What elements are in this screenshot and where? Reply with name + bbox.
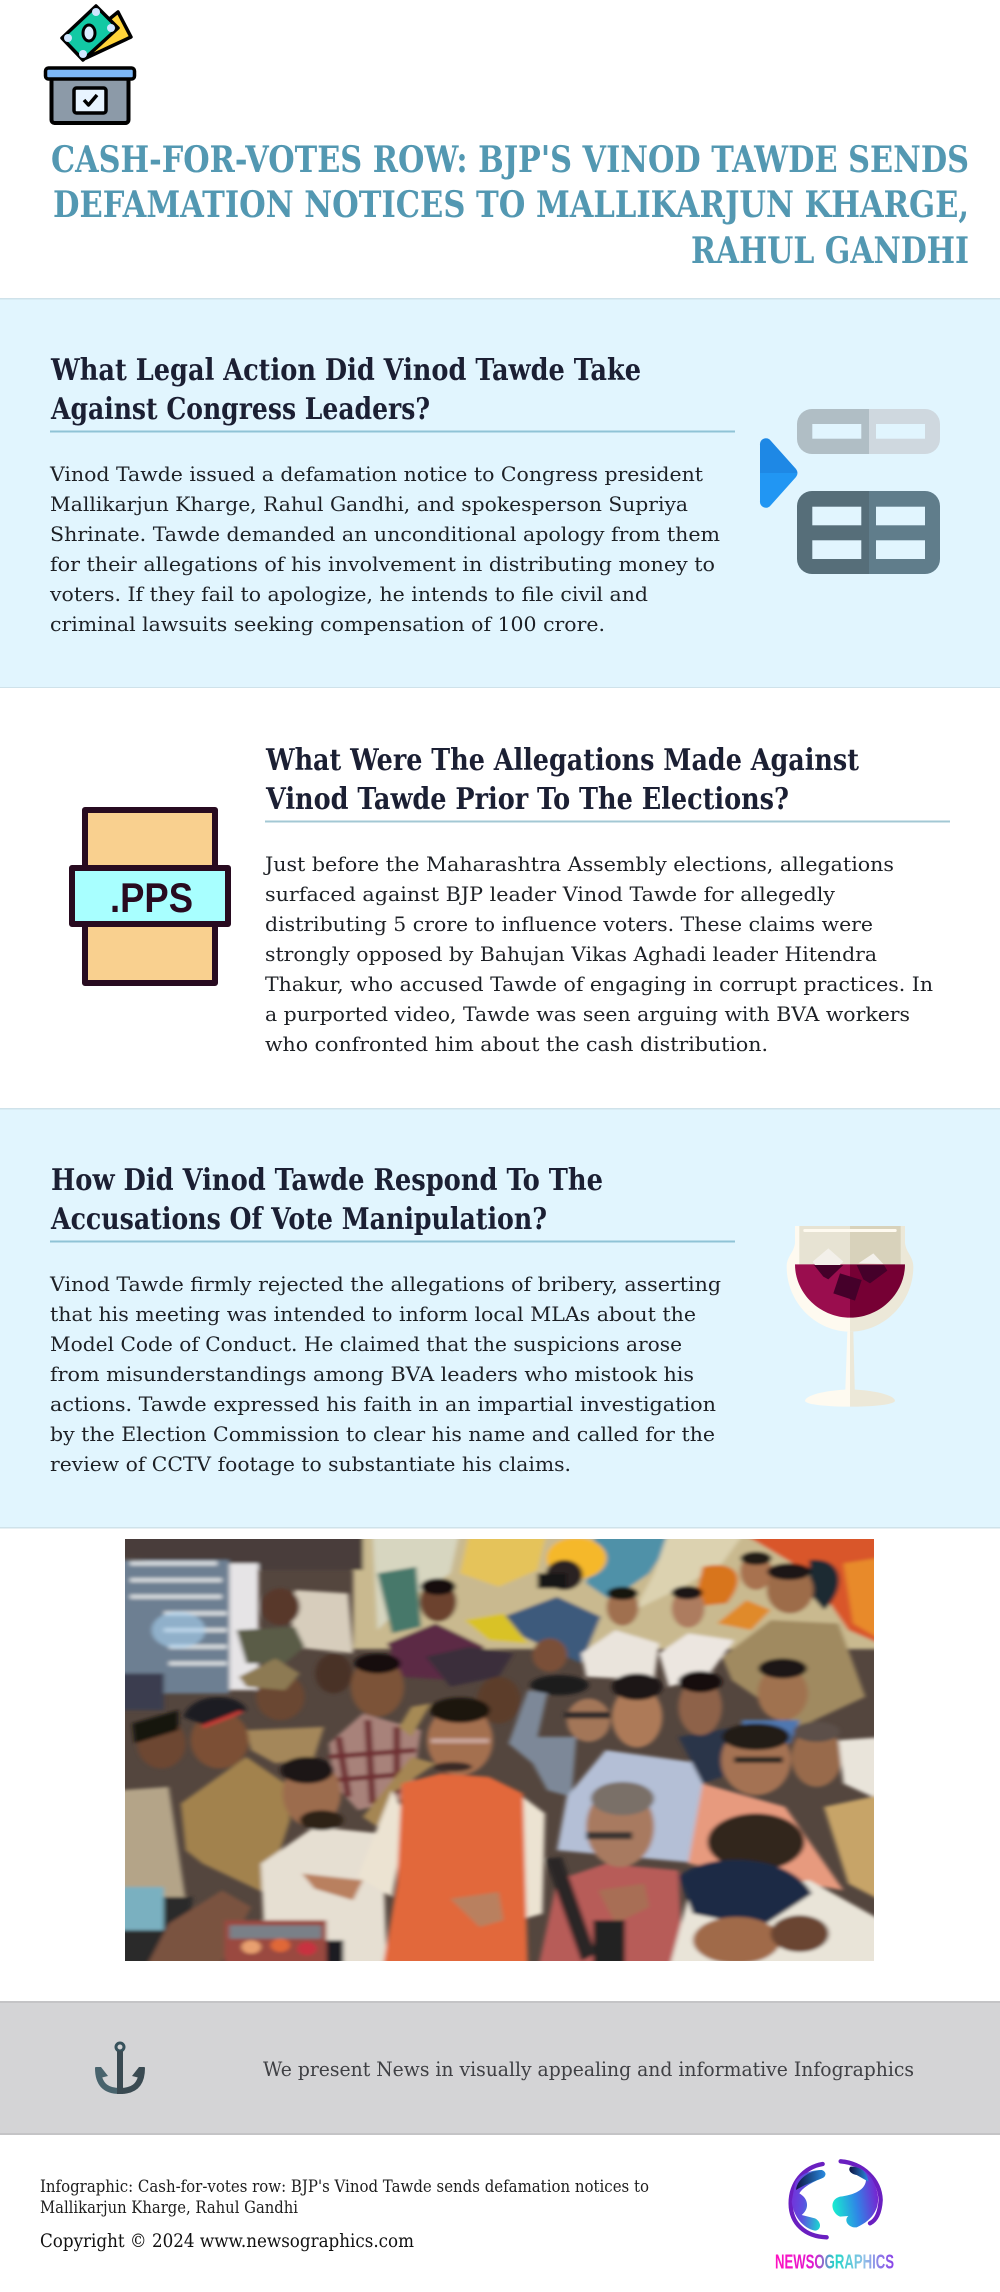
logo: Newsographics: NEWSOGRAPHICS [775,2251,894,2273]
text block: legal action: voters. If they fail to apologize, he intends to file civil and [49,582,648,606]
heading: legal action [50,353,735,432]
text block: allegations: distributing 5 crore to influence voters. These claims were [265,912,873,936]
foreground phones and hands [120,1887,164,1930]
text block: legal action: criminal lawsuits seeking compensation of 100 crore. [50,612,605,636]
heading: legal action: What Legal Action Did Vinod Tawde Take [50,353,641,388]
text block: legal action [49,462,720,636]
text block: allegations: Thakur, who accused Tawde of engaging in corrupt practices. In [265,972,933,996]
heading: response [50,1163,735,1242]
front row: police left [120,1787,186,1900]
text block: response: Vinod Tawde firmly rejected the allegations of bribery, asserting [49,1272,721,1296]
photo: crowd around Vinod Tawde [125,1539,874,1961]
back row people [261,1588,300,1625]
heading: allegations: What Were The Allegations Made Against [265,743,859,778]
text block: allegations: Just before the Maharashtra Assembly elections, allegations [263,852,894,876]
text block: legal action: Shrinate. Tawde demanded an unconditional apology from them [50,522,720,546]
logo: Newsographics [775,2161,894,2273]
panel: legal action [0,298,1000,688]
right people [538,1864,683,1970]
text block: response: actions. Tawde expressed his faith in an impartial investigation [50,1392,716,1416]
title [51,139,969,272]
text block: legal action: for their allegations of his involvement in distributing money to [50,552,715,576]
icon: PPS file [72,810,228,983]
center man [358,1790,407,1897]
text block: allegations: strongly opposed by Bahujan Vikas Aghadi leader Hitendra [265,942,877,966]
footer credits: Mallikarjun Kharge, Rahul Gandhi [40,2198,298,2218]
heading: response: Accusations Of Vote Manipulation? [50,1202,547,1237]
text block: allegations: who confronted him about the cash distribution. [265,1032,768,1056]
footer credits: Infographic: Cash-for-votes row: BJP's Vinod Tawde sends defamation notices to [40,2177,649,2197]
text block: allegations [263,852,933,1056]
band: tagline [0,2001,1000,2135]
icon: table with arrow [760,409,940,574]
heading: legal action: Against Congress Leaders? [50,392,430,427]
panel: allegations [0,688,1000,1108]
text block: allegations: a purported video, Tawde was seen arguing with BVA workers [265,1002,910,1026]
text block: response: by the Election Commission to clear his name and called for the [50,1422,715,1446]
text block: response [49,1272,721,1476]
footer credits: Copyright © 2024 www.newsographics.com [40,2231,414,2252]
icon: anchor hook [95,2043,145,2091]
heading: response: How Did Vinod Tawde Respond To The [51,1163,603,1198]
text block: response: review of CCTV footage to substantiate his claims. [50,1452,571,1476]
text block: response: Model Code of Conduct. He claimed that the suspicions arose [50,1332,682,1356]
panel: response [0,1108,1000,1528]
icon: ballot box with cash [46,6,134,123]
heading: allegations [265,743,950,822]
mid row people [329,1713,421,1810]
text block: allegations: surfaced against BJP leader Vinod Tawde for allegedly [265,882,836,906]
text block: response: that his meeting was intended to inform local MLAs about the [50,1302,696,1326]
icon: wine glass [787,1226,913,1407]
tagline text: We present News in visually appealing and informative Infographics [263,2057,914,2081]
text block: response: from misunderstandings among BVA leaders who mistook his [50,1362,694,1386]
footer credits [40,2177,649,2252]
heading: allegations: Vinod Tawde Prior To The Elections? [265,782,789,817]
text block: legal action: Vinod Tawde issued a defamation notice to Congress president [49,462,703,486]
text block: legal action: Mallikarjun Kharge, Rahul Gandhi, and spokesperson Supriya [50,492,688,516]
icon: PPS file: .PPS [110,874,193,921]
